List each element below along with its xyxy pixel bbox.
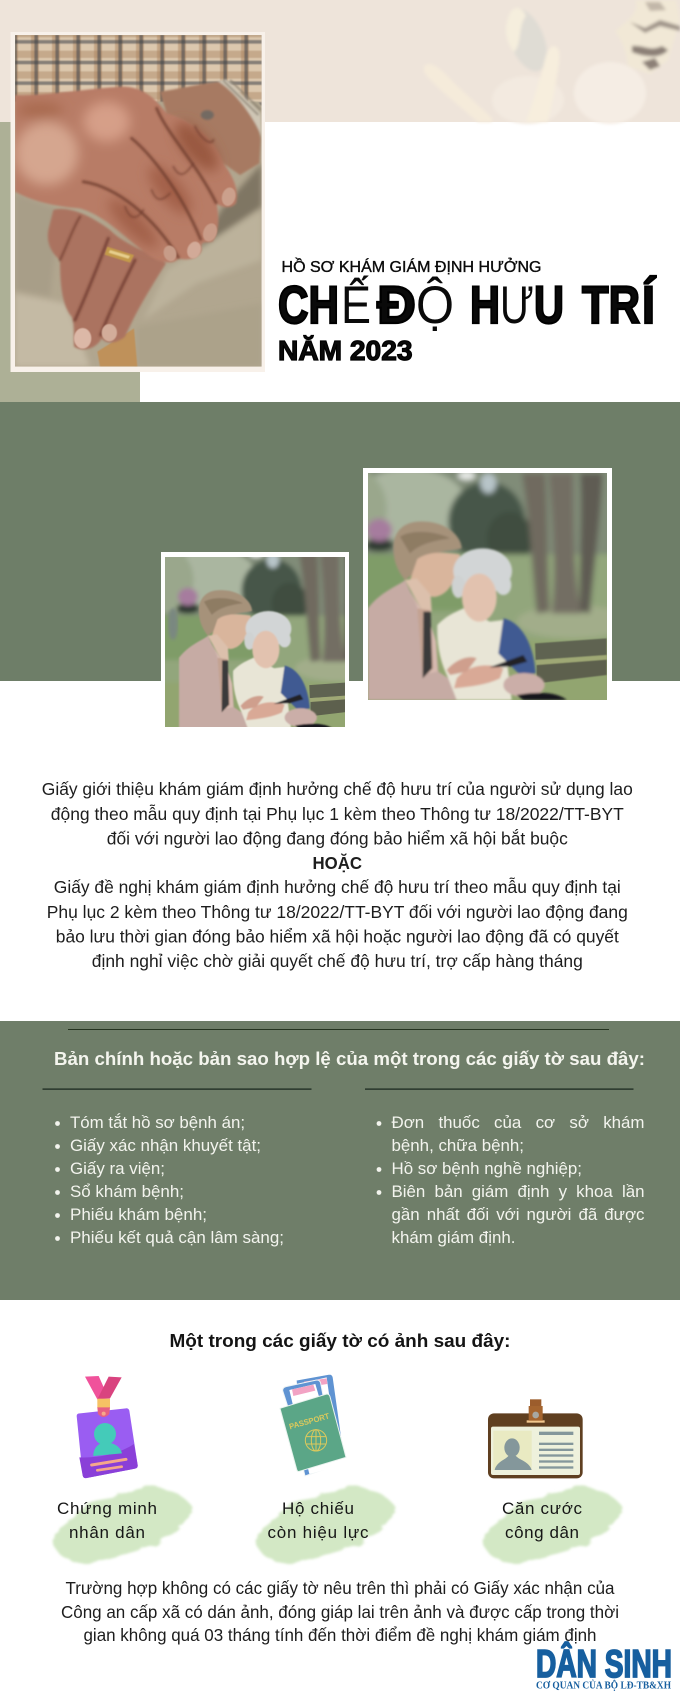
brush swatch with label: Hộ chiếu còn hiệu lực: Hộ chiếu xyxy=(282,1499,354,1518)
closing note xyxy=(61,1578,619,1645)
intro text block xyxy=(42,779,633,971)
intro text block: bảo lưu thời gian đóng bảo hiểm xã hội hoặc người lao động đã có quyết xyxy=(56,926,619,946)
right document list: Hồ sơ bệnh nghề nghiệp; xyxy=(392,1159,582,1178)
right document list xyxy=(392,1113,644,1247)
photo: two women on a bench, large xyxy=(363,468,612,700)
title main: Ế xyxy=(341,275,371,335)
title main: Đ xyxy=(377,276,416,335)
brush swatch with label: Căn cước công dân xyxy=(483,1486,622,1563)
title main: CH xyxy=(278,276,339,335)
left document list: Sổ khám bệnh; xyxy=(70,1182,184,1201)
right list bullets xyxy=(377,1121,381,1195)
icon: passport: PASSPORT xyxy=(288,1412,330,1431)
left document list: Phiếu kết quả cận lâm sàng; xyxy=(70,1228,284,1247)
right document list: gần nhất đối với người đã được xyxy=(392,1205,644,1224)
brush swatch with label: Chứng minh nhân dân xyxy=(53,1486,192,1563)
right document list: Biên bản giám định y khoa lần xyxy=(392,1182,644,1201)
intro text block: Phụ lục 2 kèm theo Thông tư 18/2022/TT-BYT đối với người lao động đang xyxy=(47,902,628,922)
brush swatch with label: Căn cước công dân: công dân xyxy=(505,1523,579,1542)
right document list: Đơn thuốc của cơ sở khám xyxy=(392,1113,644,1132)
title block xyxy=(278,257,656,366)
brush swatch with label: Chứng minh nhân dân: nhân dân xyxy=(69,1523,145,1542)
brush swatch with label: Căn cước công dân: Căn cước xyxy=(502,1499,582,1518)
title kicker: HỒ SƠ KHÁM GIÁM ĐỊNH HƯỞNG xyxy=(282,257,542,276)
right document list: bệnh, chữa bệnh; xyxy=(392,1136,524,1155)
right document list: khám giám định. xyxy=(392,1228,515,1247)
brush swatch with label: Chứng minh nhân dân: Chứng minh xyxy=(57,1499,157,1518)
panel: green band behind the photos xyxy=(0,402,680,681)
closing note: gian không quá 03 tháng tính đến thời điểm đề nghị khám giám định xyxy=(84,1625,596,1645)
intro text block: đối với người lao động đang đóng bảo hiểm xã hội bắt buộc xyxy=(107,828,568,848)
sand banner with shells xyxy=(0,0,680,124)
intro text block: định nghỉ việc chờ giải quyết chế độ hưu trí, trợ cấp hàng tháng xyxy=(92,951,583,971)
intro text block: Giấy đề nghị khám giám định hưởng chế độ hưu trí theo mẫu quy định tại xyxy=(54,877,621,897)
intro text block: động theo mẫu quy định tại Phụ lục 1 kèm theo Thông tư 18/2022/TT-BYT xyxy=(51,804,624,824)
left document list: Giấy ra viện; xyxy=(70,1159,165,1178)
photo: two women on a bench, small xyxy=(161,552,349,727)
closing note: Công an cấp xã có dán ảnh, đóng giáp lai trên ảnh và được cấp trong thời xyxy=(61,1602,619,1622)
title main: U xyxy=(534,276,564,335)
left document list: Giấy xác nhận khuyết tật; xyxy=(70,1136,261,1155)
panel heading: Bản chính hoặc bản sao hợp lệ của một trong các giấy tờ sau đây: xyxy=(54,1048,645,1069)
icon: ID card with clip xyxy=(488,1399,583,1478)
title year: NĂM 2023 xyxy=(278,335,412,366)
intro text block: Giấy giới thiệu khám giám định hưởng chế độ hưu trí của người sử dụng lao xyxy=(42,779,633,799)
brush swatch with label: Hộ chiếu còn hiệu lực: còn hiệu lực xyxy=(268,1523,369,1542)
title main: Ộ xyxy=(416,275,454,335)
photo: elderly hands on a cane xyxy=(10,32,265,372)
left document list xyxy=(55,1113,284,1247)
title main: Í xyxy=(642,275,656,335)
icon: passport xyxy=(280,1374,346,1476)
title main: TR xyxy=(582,276,640,335)
panel: documents list xyxy=(0,1021,680,1300)
section heading: photo documents: Một trong các giấy tờ có ảnh sau đây: xyxy=(170,1330,510,1351)
brush swatch with label: Hộ chiếu còn hiệu lực xyxy=(256,1486,395,1563)
sage block behind the hands photo xyxy=(0,122,140,402)
left document list: Phiếu khám bệnh; xyxy=(70,1205,207,1224)
title main: Ư xyxy=(500,276,534,335)
left document list: Tóm tắt hồ sơ bệnh án; xyxy=(70,1113,245,1132)
icon: purple ID badge xyxy=(77,1376,138,1478)
closing note: Trường hợp không có các giấy tờ nêu trên thì phải có Giấy xác nhận của xyxy=(66,1578,615,1598)
intro text block: HOẶC xyxy=(313,853,362,873)
title main: H xyxy=(470,276,500,335)
